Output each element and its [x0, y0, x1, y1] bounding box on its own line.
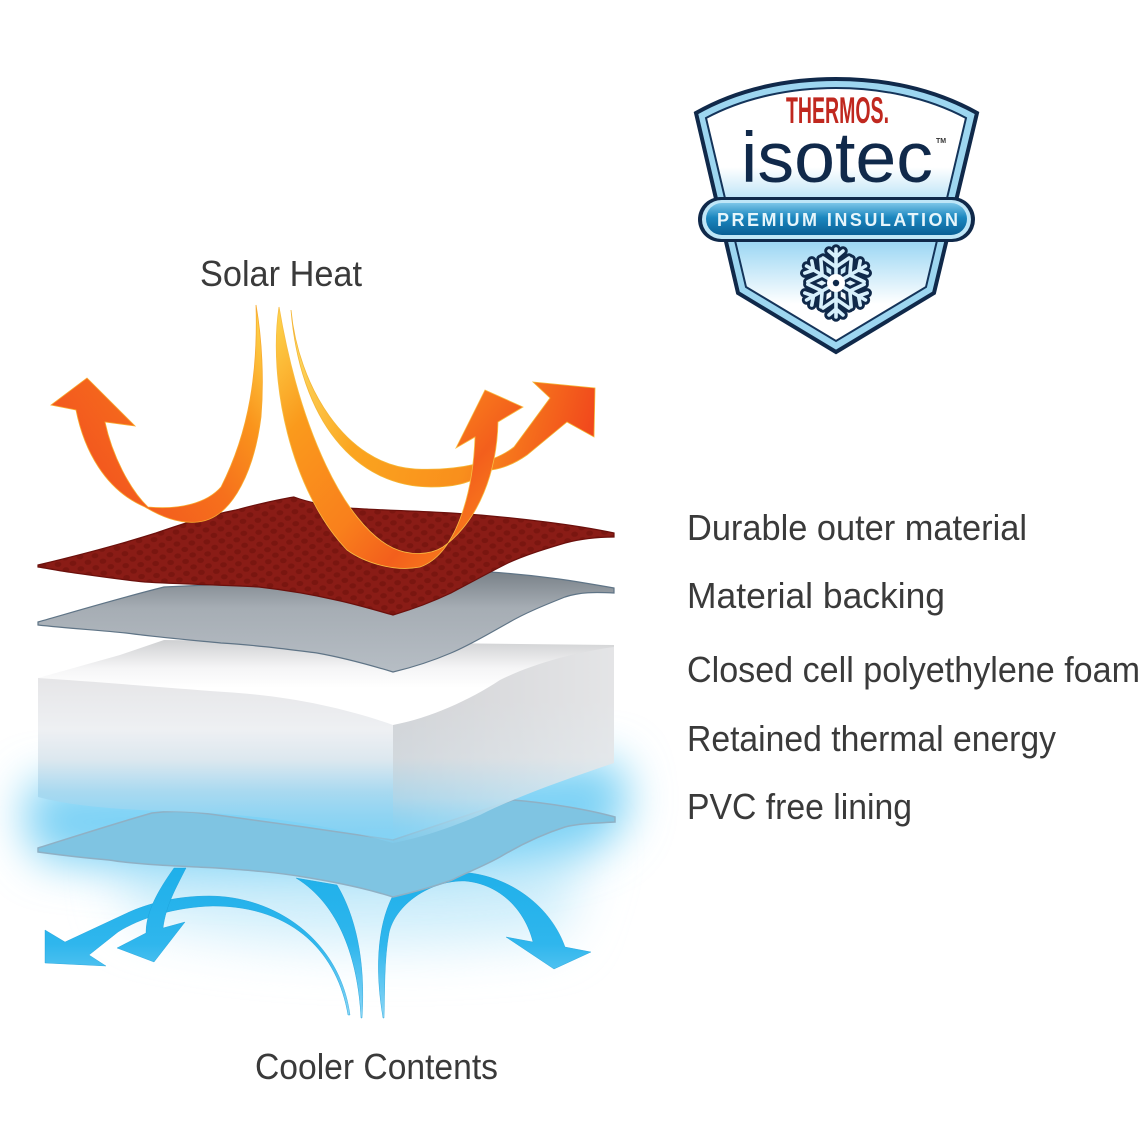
shield outline: [696, 79, 977, 352]
brand: THERMOS: THERMOS.: [786, 90, 889, 131]
label: Cooler Contents: Cooler Contents: [255, 1046, 498, 1087]
foam side highlight: [393, 647, 614, 843]
arrow: heat right far: [291, 310, 595, 487]
arrow: right: [378, 873, 591, 1018]
foam front face: [38, 678, 393, 843]
banner: premium insulation: PREMIUM INSULATION: [717, 210, 958, 230]
foam side face: [393, 647, 614, 843]
icon: snowflake: [800, 249, 872, 317]
blue glow of retained thermal energy: [25, 760, 628, 945]
label: Solar Heat: Solar Heat: [200, 253, 362, 294]
layer: PVC free lining: [38, 800, 615, 897]
foam top face: [38, 640, 614, 725]
orange heat arrows: [51, 305, 595, 568]
shield inner panel: [706, 88, 966, 341]
layer: material backing: [38, 572, 614, 672]
layer labels: [687, 507, 1140, 827]
label: Durable outer material: Durable outer material: [687, 507, 1027, 548]
arrow: heat left: [51, 305, 262, 522]
label: PVC free lining: PVC free lining: [687, 786, 912, 827]
trademark: TM: [936, 138, 946, 145]
arrow: short left: [117, 868, 186, 962]
arrow: heat middle: [276, 307, 523, 568]
layer: closed cell polyethylene foam: [38, 640, 614, 843]
layer: durable outer material: [38, 497, 614, 615]
arrow: long left: [45, 896, 350, 1015]
label: Retained thermal energy: Retained thermal energy: [687, 718, 1056, 759]
logo: Thermos isotec shield: [696, 79, 977, 352]
arrow: centre: [296, 878, 363, 1018]
wordmark: isotec: isotec: [741, 119, 933, 198]
banner: premium insulation: [698, 197, 975, 242]
blue cool arrows: [45, 868, 591, 1018]
label: Material backing: Material backing: [687, 575, 945, 616]
